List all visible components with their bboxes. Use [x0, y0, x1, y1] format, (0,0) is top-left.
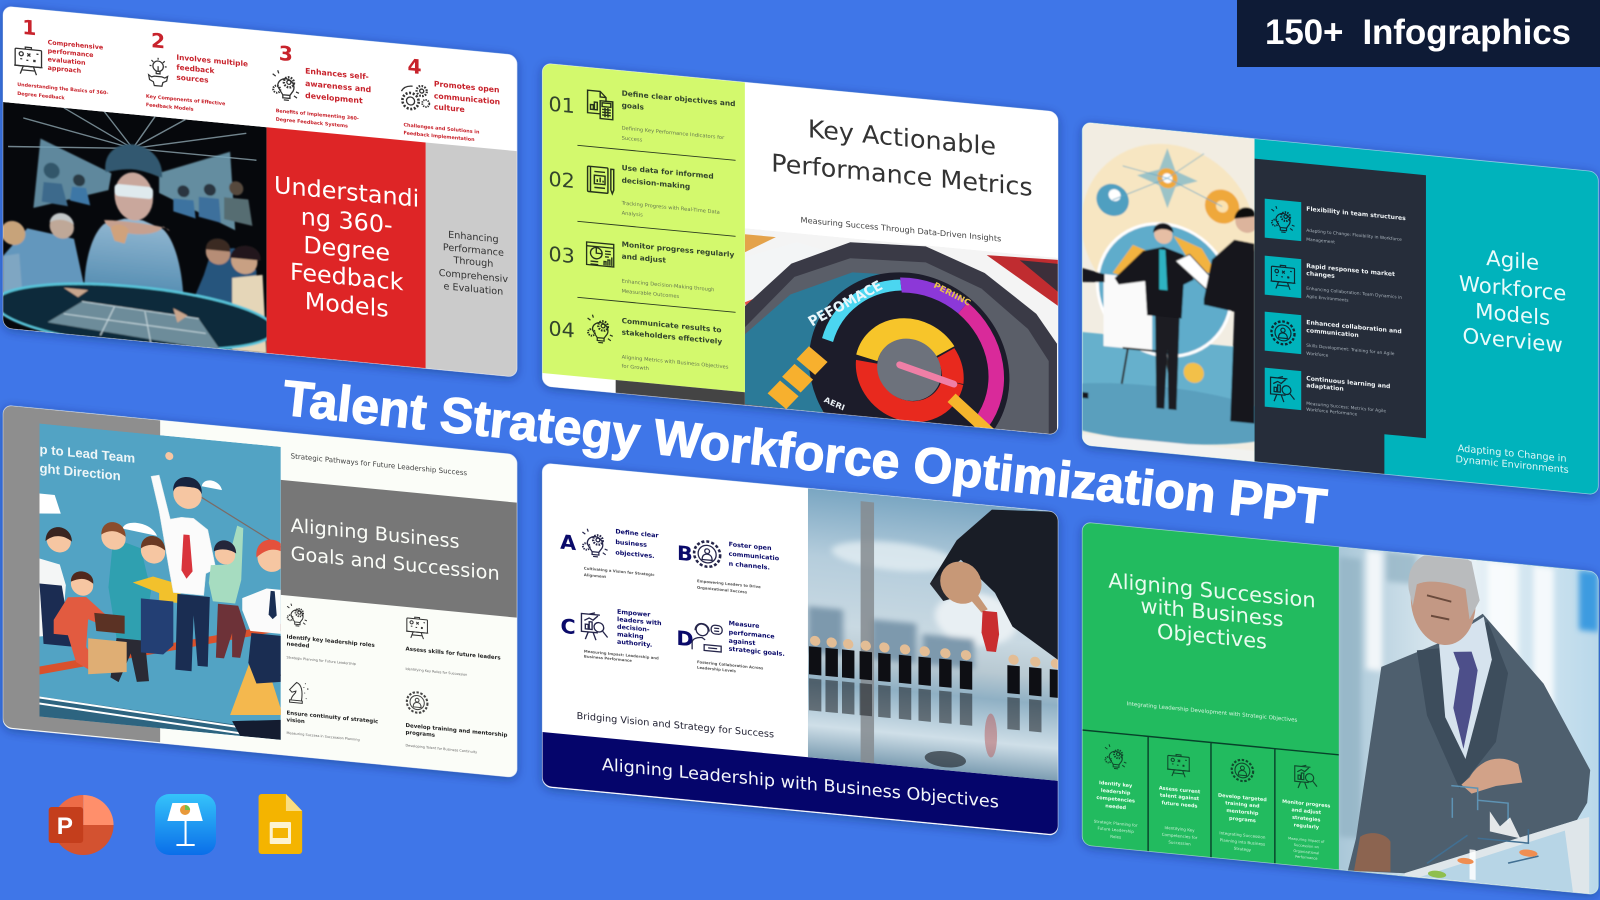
item 01: Defining Key Performance Indicators for: [622, 126, 725, 141]
item 02: 02: [549, 167, 575, 193]
subtitle: Dynamic Environments: [1456, 454, 1569, 476]
item 03: [550, 241, 734, 298]
item training: programs: [405, 730, 435, 739]
item flexibility: [1264, 198, 1406, 244]
heading: key actionable metrics: Performance Metrics: [771, 149, 1033, 202]
column 2: future needs: [1162, 800, 1198, 810]
subtitle: Strategic Pathways for Future Leadership Success: [291, 451, 467, 477]
item C: Measuring Impact: Leadership and: [584, 650, 659, 661]
panel: slide 6, aligning succession: [1082, 517, 1598, 895]
figurine row: [809, 646, 1062, 734]
item 4: [400, 58, 500, 141]
item D: against: [729, 638, 755, 647]
item 2: Involves multiple: [176, 53, 248, 68]
item 04: [550, 314, 728, 370]
item 01: Success: [622, 136, 643, 143]
heading: understanding models: Models: [305, 287, 389, 323]
icon: Keynote: [155, 794, 216, 855]
item C: leaders with: [617, 616, 662, 627]
item D: performance: [729, 629, 775, 640]
panel: slide 1, 360-degree feedback: [0, 5, 517, 383]
column 4: Measuring Impact of: [1288, 836, 1325, 844]
item 4: Promotes open: [434, 79, 500, 94]
item A: objectives.: [615, 550, 655, 560]
column 4: Performance: [1295, 855, 1317, 861]
item 01: [550, 89, 735, 142]
badge: 150+ infographics: 150+ Infographics: [1265, 13, 1571, 52]
heading: aligning succession: Objectives: [1157, 619, 1267, 654]
column 1: leadership: [1101, 788, 1131, 797]
item 04: stakeholders effectively: [622, 328, 722, 346]
item 03: Measurable Outcomes: [622, 289, 680, 300]
illustration: team on a balance beam: [39, 424, 284, 740]
item A: Cultivating a Vision for Strategic: [584, 567, 655, 577]
item leadership roles: [287, 603, 375, 668]
heading: agile workforce models: Agile: [1486, 245, 1539, 275]
heading: aligning business goals: Goals and Succession: [291, 542, 500, 585]
item C: authority.: [617, 639, 652, 649]
item continuity: Measuring Success in Succession Planning: [287, 731, 360, 742]
gauge labels: PERIINC: [932, 281, 972, 309]
item B: Organizational Success: [697, 586, 748, 594]
column 2: Competencies for: [1162, 832, 1198, 840]
item learning: Measuring Success: Metrics for Agile: [1306, 401, 1386, 414]
item 3: [273, 40, 371, 132]
item 2: sources: [176, 73, 209, 85]
item 02: Analysis: [622, 211, 643, 219]
item assess skills: Identifying Key Roles for Succession: [405, 667, 467, 677]
heading: understanding models: ng 360-: [301, 203, 393, 239]
panel: red title block: [267, 127, 426, 368]
item learning: adaptation: [1306, 382, 1344, 393]
item A: Alignment: [584, 573, 606, 579]
column 4: Organizational: [1293, 849, 1319, 855]
item 3: development: [305, 91, 363, 105]
item 1: [14, 20, 108, 100]
column 2: [1159, 753, 1201, 847]
subtitle: Bridging Vision and Strategy for Success: [577, 711, 774, 740]
item 2: Feedback Models: [146, 102, 194, 113]
badge: 150+ infographics: [1237, 0, 1600, 67]
subtitle text: Enhancing: [448, 230, 499, 245]
column 2: Assess current: [1159, 785, 1201, 795]
item flexibility: Flexibility in team structures: [1306, 206, 1406, 222]
item 3: Degree Feedback Systems: [276, 117, 348, 129]
item 04: Communicate results to: [622, 316, 722, 334]
heading: aligning business goals: Aligning Business: [291, 514, 460, 553]
item 02: [550, 164, 720, 217]
column 4: [1282, 763, 1330, 862]
item training: Developing Talent for Business Continuity: [405, 743, 477, 754]
subtitle text: Through: [452, 255, 493, 270]
item 01: goals: [622, 101, 645, 112]
item rapid response: changes: [1306, 270, 1335, 280]
panel: slide 5, aligning leadership: [542, 463, 1062, 836]
item training: Develop training and mentorship: [405, 723, 507, 739]
column 3: Planning into Business: [1220, 837, 1265, 847]
heading: agile workforce models: Workforce: [1459, 271, 1566, 306]
column 2: talent against: [1160, 793, 1200, 802]
item collaboration: [1264, 312, 1402, 357]
title: Talent Strategy Workforce Optimization PPT: [280, 370, 1329, 535]
item 1: approach: [48, 65, 82, 75]
column 1: Strategic Planning for: [1094, 819, 1138, 828]
item A: business: [615, 539, 647, 549]
item 3: awareness and: [305, 79, 371, 94]
item 03: Enhancing Decision-Making through: [622, 279, 714, 293]
item 3: Benefits of Implementing 360-: [276, 108, 359, 122]
item 1: performance: [48, 48, 94, 59]
item 03: Monitor progress regularly: [622, 240, 735, 259]
item 02: decision-making: [622, 176, 690, 191]
cartoon people: [40, 452, 281, 684]
panel: grey subtitle block: [426, 142, 517, 377]
item B: Foster open: [729, 541, 772, 552]
item C: making: [617, 631, 644, 641]
column 4: regularly: [1294, 822, 1320, 831]
gauge labels: [808, 280, 971, 410]
item leadership roles: Strategic Planning for Future Leadership: [287, 655, 356, 666]
item collaboration: Workforce: [1306, 351, 1329, 359]
item 4: Feedback Implementation: [403, 130, 475, 143]
item rapid response: Agile Environments: [1306, 294, 1349, 304]
item B: communicatio: [729, 551, 780, 562]
column 3: Develop targeted: [1218, 793, 1267, 803]
item A: Define clear: [615, 529, 659, 540]
column 1: Roles: [1110, 834, 1121, 840]
item C: Business Performance: [584, 655, 632, 663]
item 1: 1: [22, 15, 36, 40]
item 02: Use data for informed: [622, 163, 714, 181]
icon: PowerPoint: P: [57, 813, 73, 840]
item D: Leadership Levels: [697, 666, 737, 673]
item 04: for Growth: [622, 364, 649, 372]
item continuity: Ensure continuity of strategic: [287, 710, 378, 725]
item continuity: vision: [287, 717, 305, 725]
item 01: 01: [549, 92, 575, 118]
column 1: competencies: [1096, 795, 1135, 805]
panel: grey heading band: [281, 480, 517, 618]
column 1: Future Leadership: [1098, 826, 1134, 834]
item flexibility: Management: [1306, 237, 1335, 245]
subtitle text: e Evaluation: [444, 281, 503, 298]
item 02: Tracking Progress with Real-Time Data: [621, 200, 720, 216]
heading: understanding models: Feedback: [290, 258, 404, 296]
column 3: Integrating Succession: [1219, 830, 1266, 840]
icon: PowerPoint: [49, 795, 114, 855]
item D: Fostering Collaboration Across: [697, 660, 764, 671]
item 1: Degree Feedback: [17, 91, 65, 101]
subtitle: Adapting to Change in: [1458, 443, 1567, 465]
item 03: and adjust: [622, 252, 666, 265]
photo: executive with tablet: [1339, 542, 1598, 895]
photo: performance gauge: [744, 228, 1058, 434]
title band: Aligning Leadership with Business Objectives: [602, 755, 999, 813]
photo: futuristic feedback meeting: [0, 101, 275, 360]
image caption: ght Direction: [39, 461, 121, 483]
item rapid response: Rapid response to market: [1306, 263, 1395, 278]
heading: agile workforce models: Overview: [1463, 323, 1563, 357]
column 2: Identifying Key: [1165, 825, 1195, 833]
subtitle text: Comprehensiv: [439, 268, 508, 285]
item 04: Aligning Metrics with Business Objectives: [622, 355, 729, 371]
item learning: [1265, 368, 1390, 421]
item D: Measure: [729, 620, 759, 630]
gauge labels: AERI: [823, 395, 846, 412]
item C: [561, 603, 662, 666]
item rapid response: [1264, 256, 1402, 302]
photo: business people and globe: [1082, 123, 1254, 462]
column 4: Monitor progress: [1282, 799, 1330, 809]
item 3: 3: [279, 41, 293, 66]
panel: slide 2, performance metrics: [542, 63, 1058, 481]
column 3: mentorship: [1226, 808, 1259, 817]
item 2: 2: [151, 28, 165, 53]
item collaboration: Enhanced collaboration and: [1306, 319, 1402, 335]
item learning: Continuous learning and: [1306, 375, 1390, 390]
item 2: feedback: [176, 63, 216, 75]
item 03: 03: [549, 242, 575, 268]
panel: dark item list: [1255, 159, 1426, 478]
item 04: 04: [549, 316, 575, 342]
item continuity: [287, 682, 378, 744]
item 1: Comprehensive: [48, 39, 103, 52]
item 4: culture: [434, 102, 465, 114]
item 2: Key Components of Effective: [146, 94, 226, 107]
item collaboration: Skills Development: Training for an Agile: [1306, 343, 1395, 357]
item 01: Define clear objectives and: [622, 89, 736, 108]
item assess skills: [405, 616, 501, 680]
item 1: evaluation: [48, 56, 86, 67]
item 1: Understanding the Basics of 360-: [17, 82, 108, 97]
panel: slide 4, aligning business goals: [3, 405, 517, 778]
column 3: [1218, 758, 1267, 854]
item training: [405, 691, 507, 757]
column 4: and adjust: [1291, 807, 1322, 816]
item 2: [146, 32, 248, 111]
panel: lime list: [542, 63, 745, 406]
item 4: Challenges and Solutions in: [403, 122, 480, 136]
column 1: Identify key: [1099, 780, 1133, 789]
item learning: Workforce Performance: [1306, 407, 1358, 418]
panel: slide 3, agile workforce: [1021, 116, 1598, 495]
column 1: [1094, 743, 1138, 841]
item D: [676, 615, 785, 678]
item D: strategic goals.: [729, 646, 785, 658]
item C: C: [561, 614, 576, 639]
item 4: 4: [408, 54, 422, 79]
icon: Google Slides: [259, 794, 302, 854]
heading: aligning succession: Aligning Succession: [1108, 569, 1316, 613]
subtitle text: Performance: [443, 242, 504, 259]
heading: aligning succession: with Business: [1140, 594, 1283, 631]
heading: understanding models: Understandi: [274, 171, 419, 213]
item collaboration: communication: [1306, 327, 1359, 339]
column 4: Succession on: [1294, 843, 1319, 849]
item D: D: [676, 626, 694, 651]
item assess skills: Assess skills for future leaders: [405, 646, 501, 662]
item leadership roles: Identify key leadership roles: [287, 634, 375, 649]
item rapid response: Enhancing Collaboration: Team Dynamics in: [1306, 286, 1402, 301]
item B: Empowering Leaders to Drive: [697, 579, 761, 589]
photo: hand placing figurines: [808, 488, 1062, 781]
item 3: Enhances self-: [305, 66, 369, 81]
item flexibility: Adapting to Change: Flexibility in Workforce: [1306, 228, 1402, 243]
column 3: training and: [1225, 800, 1260, 810]
item C: decision-: [617, 624, 650, 634]
item 4: communication: [434, 91, 500, 107]
item A: [560, 523, 659, 584]
item C: Empower: [617, 609, 651, 619]
subtitle: Integrating Leadership Development with Strategic Objectives: [1127, 701, 1298, 724]
column 3: Strategy: [1234, 846, 1252, 852]
column 2: Succession: [1168, 839, 1191, 847]
gauge labels: PEFOMACE: [805, 278, 886, 330]
item leadership roles: needed: [287, 641, 309, 650]
item B: n channels.: [729, 561, 770, 572]
column 3: programs: [1229, 816, 1256, 824]
subtitle: Measuring Success Through Data-Driven Insights: [801, 216, 1001, 243]
image caption: p to Lead Team: [39, 442, 135, 466]
heading: agile workforce models: Models: [1475, 298, 1550, 330]
heading: key actionable metrics: Key Actionable: [808, 115, 996, 161]
item B: [677, 536, 780, 598]
item B: B: [677, 541, 693, 566]
column 1: needed: [1105, 803, 1126, 811]
title band: [542, 732, 1058, 835]
heading: understanding models: Degree: [303, 231, 390, 267]
column 4: strategies: [1292, 815, 1321, 824]
item A: A: [560, 530, 576, 555]
